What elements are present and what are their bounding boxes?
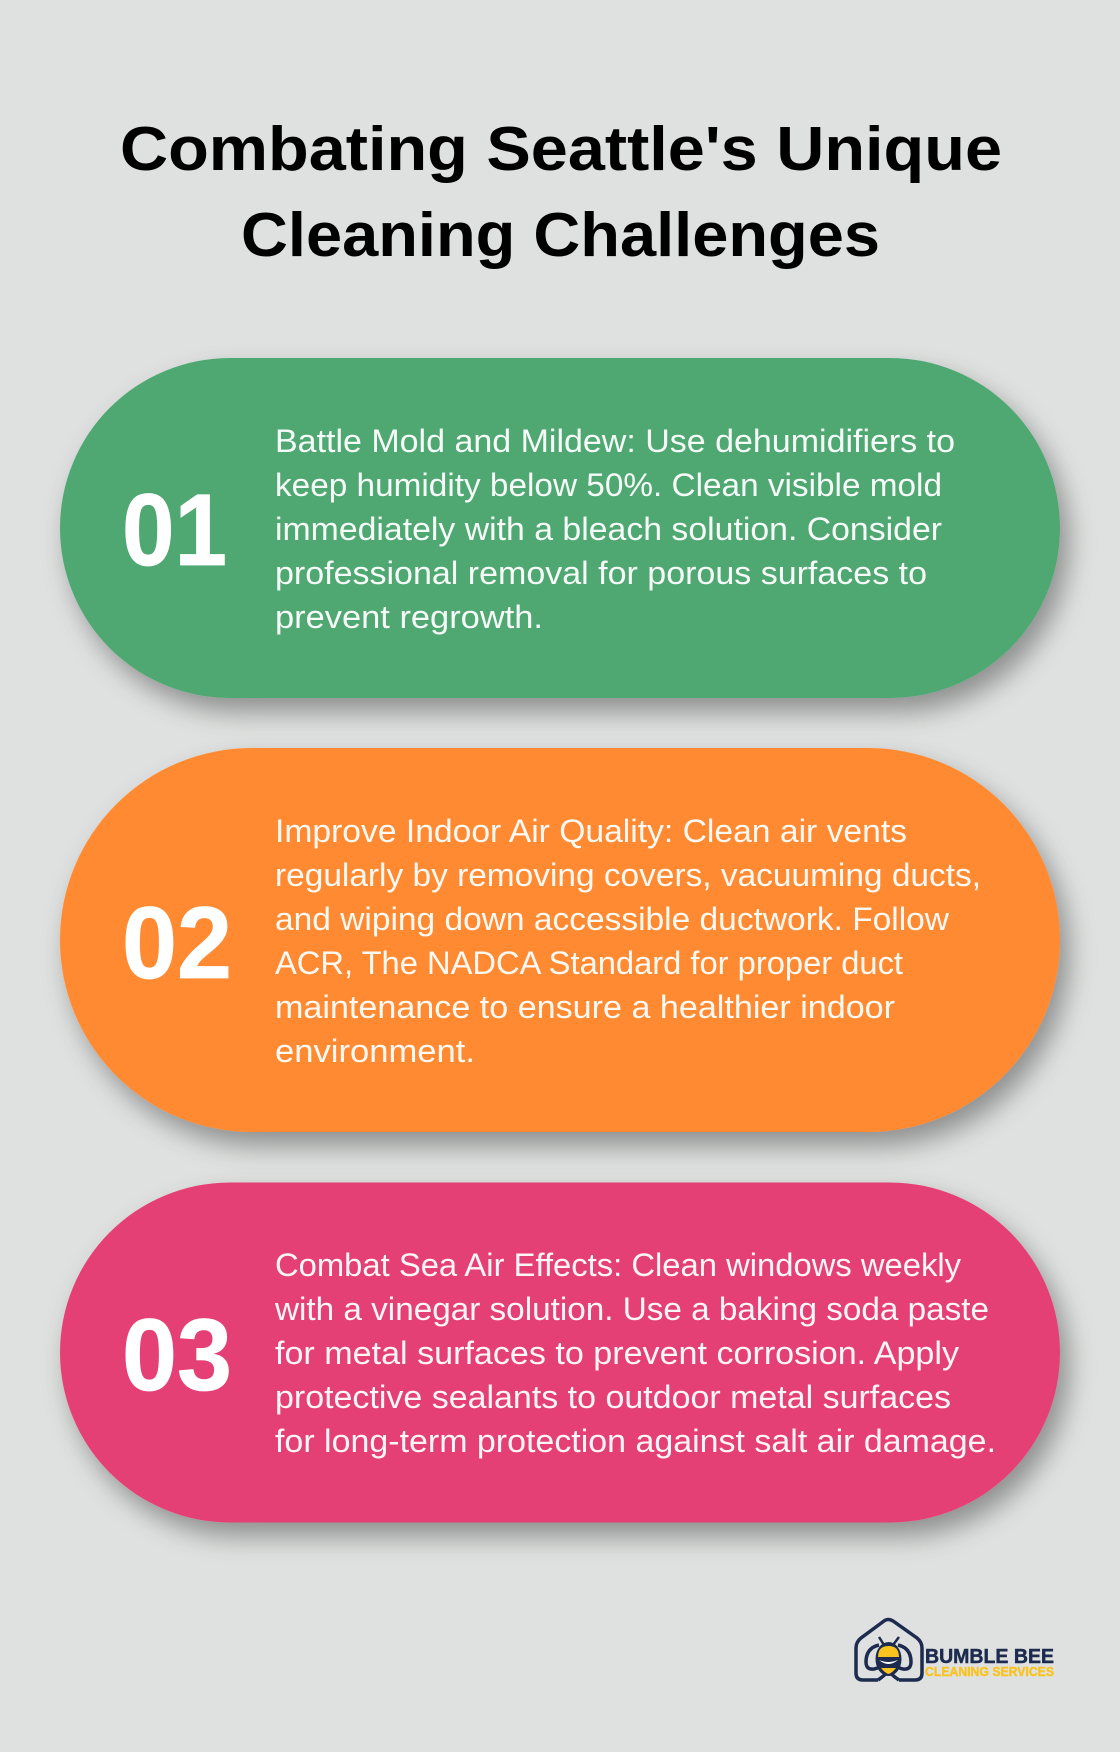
green pill background xyxy=(60,358,1060,698)
pink pill background xyxy=(60,1182,1060,1522)
icon: house outline with bee xyxy=(856,1620,922,1680)
title xyxy=(120,115,1002,270)
title: Cleaning Challenges xyxy=(241,201,880,270)
body text 03: Combat Sea Air Effects: Clean windows weekly xyxy=(275,1247,961,1283)
body text 01: professional removal for porous surfaces to xyxy=(275,555,927,591)
body text 03: for long-term protection against salt air damage. xyxy=(275,1423,996,1459)
body text 02: and wiping down accessible ductwork. Follow xyxy=(275,901,950,937)
body text 03: with a vinegar solution. Use a baking soda paste xyxy=(274,1291,989,1327)
orange pill background xyxy=(60,748,1060,1132)
title: Combating Seattle's Unique xyxy=(120,115,1002,184)
number 01: 01 xyxy=(122,473,227,587)
logo wordmark: BUMBLE BEE xyxy=(925,1645,1054,1668)
number 03: 03 xyxy=(122,1298,232,1412)
panel: 03 sea air effects xyxy=(60,1182,1060,1522)
body text 03: for metal surfaces to prevent corrosion. Apply xyxy=(275,1335,959,1371)
body text 01: immediately with a bleach solution. Consider xyxy=(275,511,942,547)
body text 02 xyxy=(275,813,981,1069)
body text 02: maintenance to ensure a healthier indoor xyxy=(275,989,895,1025)
panel: 01 mold and mildew xyxy=(60,358,1060,698)
logo tagline: CLEANING SERVICES xyxy=(925,1664,1054,1679)
body text 02: Improve Indoor Air Quality: Clean air vents xyxy=(275,813,907,849)
body text 02: environment. xyxy=(275,1033,475,1069)
body text 02: ACR, The NADCA Standard for proper duct xyxy=(275,945,903,981)
logo: Bumble Bee Cleaning Services xyxy=(856,1620,1054,1680)
body text 03 xyxy=(274,1247,996,1459)
panel: 02 indoor air quality xyxy=(60,748,1060,1132)
body text 02: regularly by removing covers, vacuuming ducts, xyxy=(275,857,981,893)
body text 01: keep humidity below 50%. Clean visible mold xyxy=(275,467,942,503)
body text 03: protective sealants to outdoor metal surfaces xyxy=(275,1379,951,1415)
body text 01 xyxy=(275,423,955,635)
body text 01: Battle Mold and Mildew: Use dehumidifiers to xyxy=(275,423,955,459)
number 02: 02 xyxy=(122,886,232,1000)
body text 01: prevent regrowth. xyxy=(275,599,543,635)
